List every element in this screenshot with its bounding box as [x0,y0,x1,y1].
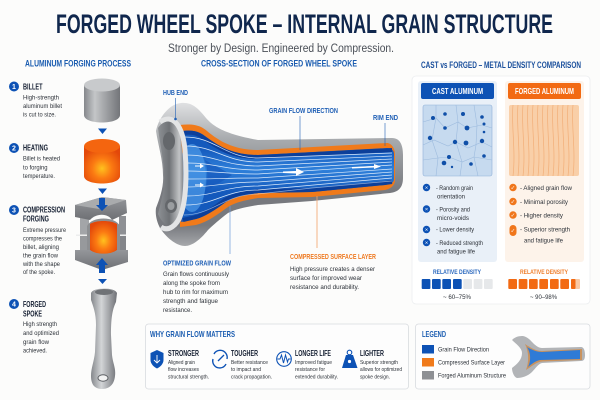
cast properties list: × [425,186,428,192]
arrow: compression to forged spoke [98,279,107,284]
panel: legend [416,324,590,389]
legend item: compressed surface layer: Compressed Surface Layer [438,360,506,366]
forged properties list: ✓ [511,228,515,234]
heading: cross-section: CROSS-SECTION OF FORGED WHEEL SPOKE [201,58,357,70]
benefit: tougher: crack propagation. [231,374,272,380]
forged properties list: ✓ [511,213,515,219]
cast properties list: - Porosity and [436,206,470,214]
step 2: heating: temperature. [23,173,55,180]
benefit: tougher: Better resistance [231,360,268,366]
label: hub end [163,88,188,120]
heading: forging process: ALUMINUM FORGING PROCESS [25,58,131,70]
callout: compressed surface layer: surface for improved wear [290,275,363,282]
label: grain flow direction [269,106,338,150]
arrow: billet to heating [98,128,107,134]
flow arrows [195,164,381,188]
benefit: longer life: Improved fatigue [295,360,332,366]
benefit: tougher: TOUGHER [231,349,258,358]
meter: forged relative density: ~ 90–98% [530,294,557,301]
step 3: compression forging [9,205,66,276]
benefit: stronger: structural strength. [168,374,209,380]
legend item: grain flow direction [422,345,489,354]
step 3: compression forging: the grain flow [23,252,58,260]
cast properties list [423,184,483,256]
icon: finished forged spoke [91,288,117,389]
benefit: stronger: STRONGER [168,349,199,358]
step 1: billet: BILLET [23,82,43,92]
step 2: heating: Billet is heated [23,156,60,162]
step 4: forged spoke: High strength [23,321,57,328]
forged properties list: ✓ [511,200,515,206]
icon: heated billet cylinder [84,139,120,184]
label: rim end [373,113,398,146]
step 2: heating [9,143,60,180]
heading: why grain flow matters: WHY GRAIN FLOW MATTERS [150,329,235,339]
cast properties list: - Reduced strength [436,240,483,247]
label: rim end: RIM END [373,113,398,122]
callout: compressed surface layer [290,196,376,291]
step 3: compression forging: FORGING [23,214,49,224]
grain flow core [181,131,394,222]
dark edge bands and hub glow [178,133,392,220]
callout: optimized grain flow: along the spoke from [163,280,220,287]
step 1: billet: High-strength [23,94,59,102]
benefit: lighter: spoke design. [360,374,390,380]
column: forged aluminum [505,81,584,262]
cast properties list: × [425,240,428,246]
cast properties list: - Random grain [436,185,473,192]
compressed surface layer [180,125,395,227]
benefit: stronger [150,349,209,380]
forged properties list: - Superior strength [520,226,570,234]
step 4: forged spoke: achieved. [23,348,47,354]
meter: forged relative density: RELATIVE DENSITY [520,269,569,276]
heading: legend: LEGEND [422,329,446,339]
step 2: heating: 2 [12,146,16,152]
column: forged aluminum: FORGED ALUMINUM [515,86,574,96]
label: hub end: HUB END [163,88,188,97]
step 4: forged spoke [9,299,59,354]
forged properties list: - Aligned grain flow [520,185,572,192]
benefit: lighter: allows for optimized [360,367,402,373]
meter: cast relative density [422,269,493,301]
benefit: tougher: to impact and [231,367,261,373]
benefit: lighter: LIGHTER [360,349,384,358]
callout: compressed surface layer: High pressure creates a denser [290,266,376,273]
diagram: spoke cross-section [156,103,403,246]
callout: optimized grain flow: Grain flows continuously [163,271,230,278]
cast properties list: and fatigue life [437,248,475,256]
legend item: forged aluminum structure: Forged Aluminum Structure [438,372,506,380]
benefit: longer life: resistance for [295,367,325,373]
step 2: heating: to forging [23,164,48,172]
step 3: compression forging: Extreme pressure [23,227,66,234]
icon: aluminum billet cylinder [84,78,120,122]
panel: why grain flow matters [146,324,408,389]
panel: density comparison [412,76,590,304]
callout: optimized grain flow [163,206,232,314]
step 3: compression forging: billet, aligning [23,244,59,251]
step 3: compression forging: of the spoke. [23,269,55,276]
meter: cast relative density: ~ 60–75% [443,294,471,301]
step 3: compression forging: 3 [12,208,16,214]
benefit: lighter: Superior strength [360,360,398,366]
column: cast aluminum [418,81,497,262]
legend spoke thumbnail [512,336,585,378]
hub end face [158,119,186,229]
step 3: compression forging: compresses the [23,236,62,242]
forged properties list: - Minimal porosity [520,199,569,206]
legend item: compressed surface layer [422,358,506,366]
benefit: longer life [277,349,338,380]
callout: optimized grain flow: hub to rim for maximum [163,289,228,296]
legend item: grain flow direction: Grain Flow Direction [438,346,489,354]
step 4: forged spoke: grain flow [23,339,49,346]
legend item: forged aluminum structure [422,371,506,380]
benefit: stronger: flow increases [168,367,199,373]
icon: forging press with hot billet [75,197,128,273]
meter: forged relative density [508,269,580,301]
grain flow lines [184,137,392,215]
step 1: billet: aluminum billet [23,103,62,110]
subtitle: Stronger by Design. Engineered by Compression. [168,43,394,55]
callout: optimized grain flow: resistance. [163,307,192,314]
callout: optimized grain flow: OPTIMIZED GRAIN FLOW [163,258,232,268]
forged microstructure [509,105,579,176]
benefit: longer life: extended durability. [295,374,338,380]
panel: aluminum forging process [9,58,131,389]
cast properties list: × [425,228,428,234]
cast microstructure [423,105,492,176]
step 1: billet: is cut to size. [23,112,56,118]
callout: optimized grain flow: strength and fatigue [163,298,218,305]
step 2: heating: HEATING [23,144,48,152]
step 3: compression forging: with the shape [22,261,60,268]
step 1: billet: 1 [12,84,16,91]
forged properties list: - Higher density [520,212,564,220]
step 4: forged spoke: 4 [12,302,16,308]
meter: cast relative density: RELATIVE DENSITY [433,269,482,276]
callout: compressed surface layer: resistance and durability. [290,284,359,291]
cast properties list: orientation [437,194,465,200]
step 4: forged spoke: FORGED [23,300,46,309]
benefit: longer life: LONGER LIFE [295,349,331,358]
step 3: compression forging: COMPRESSION [23,206,65,214]
step 1: billet [9,82,62,118]
step 4: forged spoke: SPOKE [23,310,42,318]
cast properties list: - Lower density [436,226,475,234]
aluminum body [156,103,403,246]
forged properties list: ✓ [511,186,515,192]
cast properties list: micro-voids [437,215,470,222]
arrow: heating to compression [98,188,107,194]
label: grain flow direction: GRAIN FLOW DIRECTION [269,106,338,115]
benefit: lighter [342,349,402,380]
benefit: stronger: Aligned grain [168,360,195,366]
forged properties list: and fatigue life [524,238,563,244]
benefit: tougher [213,349,272,380]
step 4: forged spoke: and optimized [23,330,59,337]
forged properties list [509,184,572,244]
column: cast aluminum: CAST ALUMINUM [432,86,483,96]
callout: compressed surface layer: COMPRESSED SURFACE LAYER [290,252,376,261]
cast properties list: × [425,207,428,213]
